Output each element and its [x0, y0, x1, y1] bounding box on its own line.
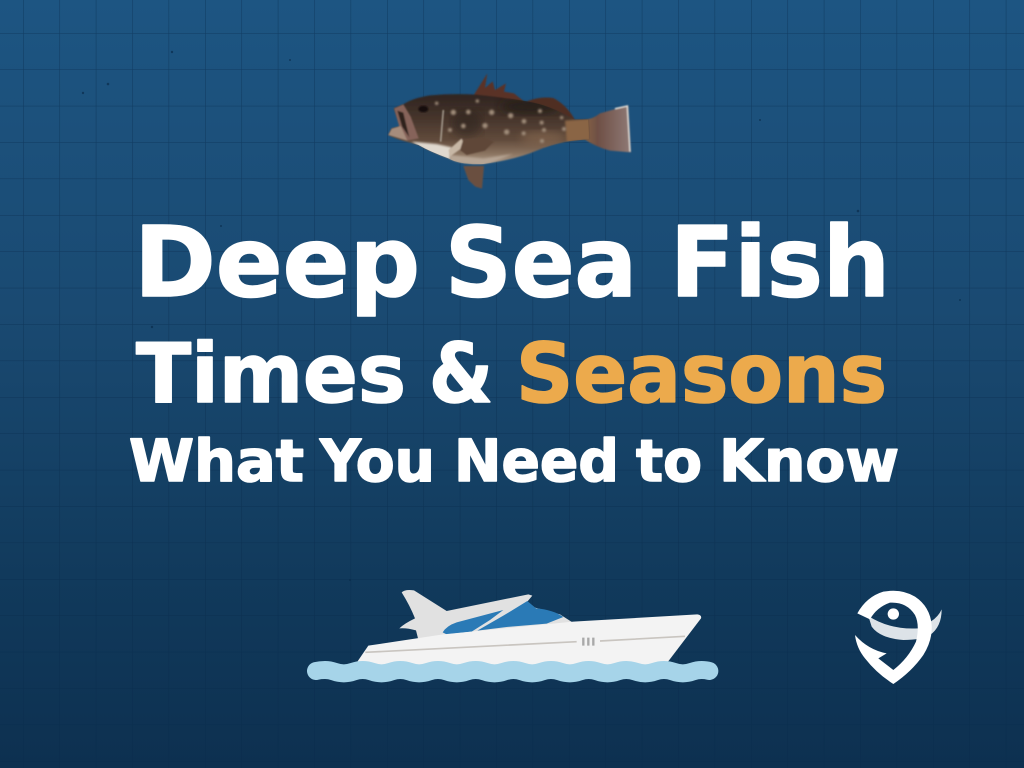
- eye: [418, 106, 428, 112]
- white spots: [435, 99, 566, 143]
- brand logo: fish hook: [855, 591, 942, 684]
- subtitle: Times & Seasons: Times: [136, 327, 406, 422]
- highlighted word: Seasons: Seasons: [516, 327, 887, 422]
- tagline: What You Need to Know: What: [129, 428, 304, 495]
- belly highlight: [412, 142, 452, 160]
- tail fin: [583, 105, 631, 152]
- subtitle: Times & Seasons: [136, 327, 887, 422]
- tagline: What You Need to Know: Know: [719, 428, 899, 495]
- tagline: What You Need to Know: to: [636, 428, 702, 495]
- boat illustration: [316, 590, 709, 673]
- soft dorsal fin: [527, 97, 575, 119]
- boat cabin and fly bridge: [399, 590, 574, 638]
- body shading: [452, 110, 482, 137]
- fish body: [388, 94, 589, 164]
- gill and pectoral fin: [441, 110, 443, 142]
- dorsal spines: [474, 73, 524, 101]
- hull stripe: [365, 636, 685, 652]
- hull vents: [583, 638, 593, 646]
- title: Deep Sea Fish: Sea: [445, 206, 637, 319]
- tail peduncle: [565, 119, 590, 142]
- mouth: [394, 104, 419, 141]
- subtitle: Times & Seasons: &: [429, 327, 493, 422]
- ventral fin: [463, 166, 484, 189]
- tagline: What You Need to Know: [129, 428, 899, 495]
- tagline: What You Need to Know: You: [319, 428, 435, 495]
- title: Deep Sea Fish: Deep: [134, 206, 420, 319]
- logo hook body: [855, 591, 932, 684]
- title: Deep Sea Fish: Fish: [670, 206, 890, 319]
- hull: [352, 614, 701, 670]
- logo band: [868, 609, 942, 640]
- cabin windows: [443, 601, 563, 634]
- tagline: What You Need to Know: Need: [454, 428, 619, 495]
- water waves: [316, 670, 709, 673]
- logo eye: [888, 608, 899, 620]
- title: Deep Sea Fish: [134, 206, 890, 319]
- fish illustration: [388, 73, 631, 189]
